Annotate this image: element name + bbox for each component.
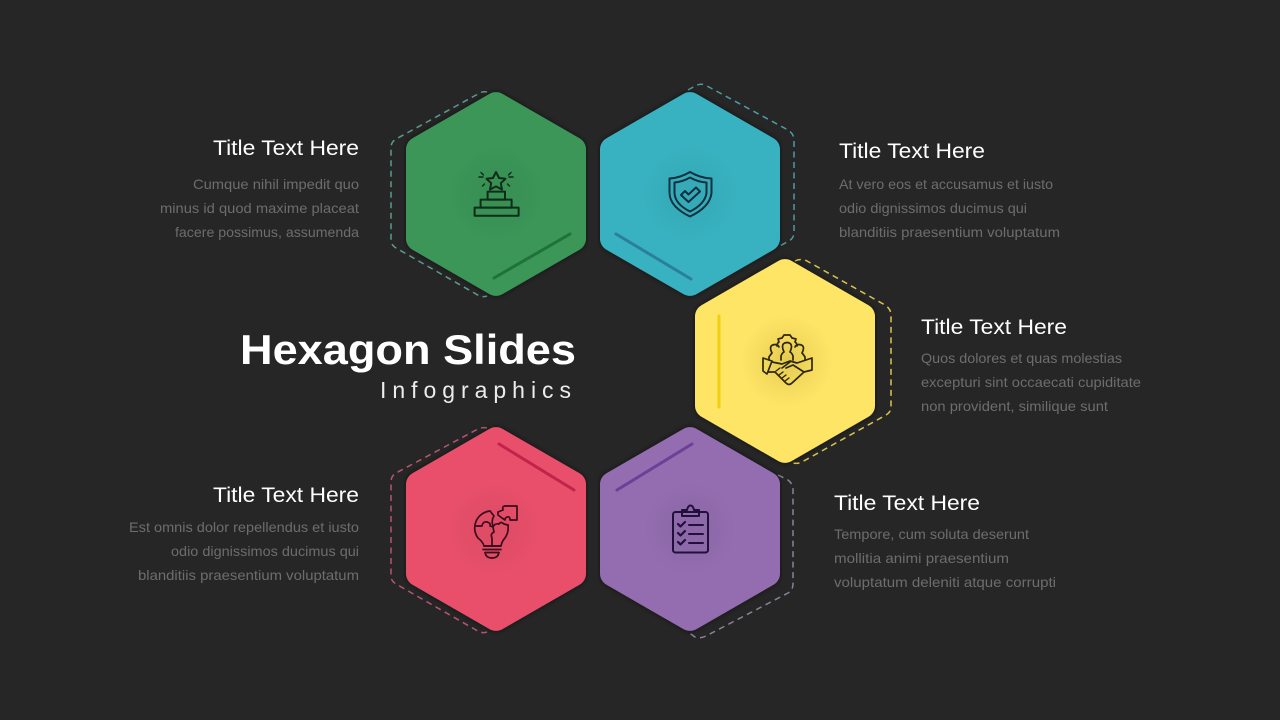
- title: Title Text Here: [834, 492, 980, 515]
- accent line: [617, 444, 692, 490]
- description: Cumque nihil impedit quo: [193, 176, 359, 192]
- subheading: Infographics: [380, 377, 571, 403]
- title: Title Text Here: [213, 484, 359, 507]
- hexagon shape: [613, 440, 767, 618]
- dashed outline: [391, 428, 487, 633]
- accent line: [499, 444, 574, 490]
- icon glow: [448, 146, 544, 242]
- description: [839, 176, 1060, 240]
- title: Title Text Here: [213, 137, 359, 160]
- description: minus id quod maxime placeat: [160, 200, 359, 216]
- description: odio dignissimos ducimus qui: [171, 543, 359, 559]
- dashed outline: [688, 475, 793, 638]
- description: Tempore, cum soluta deserunt: [834, 526, 1029, 542]
- description: [834, 526, 1056, 590]
- text block: bottom left: [129, 484, 359, 583]
- dashed outline: [688, 84, 794, 247]
- title: Title Text Here: [839, 140, 985, 163]
- description: [160, 176, 359, 240]
- description: excepturi sint occaecati cupiditate: [921, 374, 1141, 390]
- description: Est omnis dolor repellendus et iusto: [129, 519, 359, 535]
- description: [921, 350, 1141, 414]
- description: non provident, similique sunt: [921, 398, 1108, 414]
- description: blanditiis praesentium voluptatum: [839, 224, 1060, 240]
- panel: purple hexagon: [613, 440, 793, 638]
- description: odio dignissimos ducimus qui: [839, 200, 1027, 216]
- text block: top right: [839, 140, 1060, 240]
- hexagon shape: [613, 105, 767, 283]
- hexagon shape: [708, 272, 862, 450]
- icon glow: [446, 481, 542, 577]
- icon: clipboard checklist: [673, 506, 708, 552]
- hexagon shape: [419, 105, 573, 283]
- description: facere possimus, assumenda: [175, 224, 359, 240]
- panel: green hexagon: [391, 92, 573, 297]
- main title: [240, 326, 576, 403]
- description: mollitia animi praesentium: [834, 550, 1009, 566]
- icon glow: [642, 146, 738, 242]
- description: Quos dolores et quas molestias: [921, 350, 1122, 366]
- icon: handshake with gear and people: [763, 335, 812, 384]
- icon glow: [642, 481, 738, 577]
- icon glow: [741, 315, 833, 407]
- description: voluptatum deleniti atque corrupti: [834, 574, 1056, 590]
- accent line: [718, 316, 720, 407]
- text block: middle right: [921, 316, 1141, 414]
- title: Title Text Here: [921, 316, 1067, 339]
- dashed outline: [391, 92, 487, 297]
- icon: star on podium: [475, 172, 519, 216]
- accent line: [616, 234, 691, 279]
- icon: shield with check: [670, 172, 712, 216]
- accent line: [494, 234, 570, 278]
- panel: yellow hexagon: [708, 260, 891, 463]
- panel: red hexagon: [391, 428, 574, 633]
- icon: light bulb with puzzle piece: [475, 506, 517, 558]
- panel: teal hexagon: [613, 84, 794, 283]
- heading: Hexagon Slides: [240, 326, 576, 373]
- hexagon shape: [419, 440, 573, 618]
- description: [129, 519, 359, 583]
- text block: bottom right: [834, 492, 1056, 590]
- description: At vero eos et accusamus et iusto: [839, 176, 1053, 192]
- dashed outline: [793, 260, 891, 463]
- description: blanditiis praesentium voluptatum: [138, 567, 359, 583]
- text block: top left: [160, 137, 359, 240]
